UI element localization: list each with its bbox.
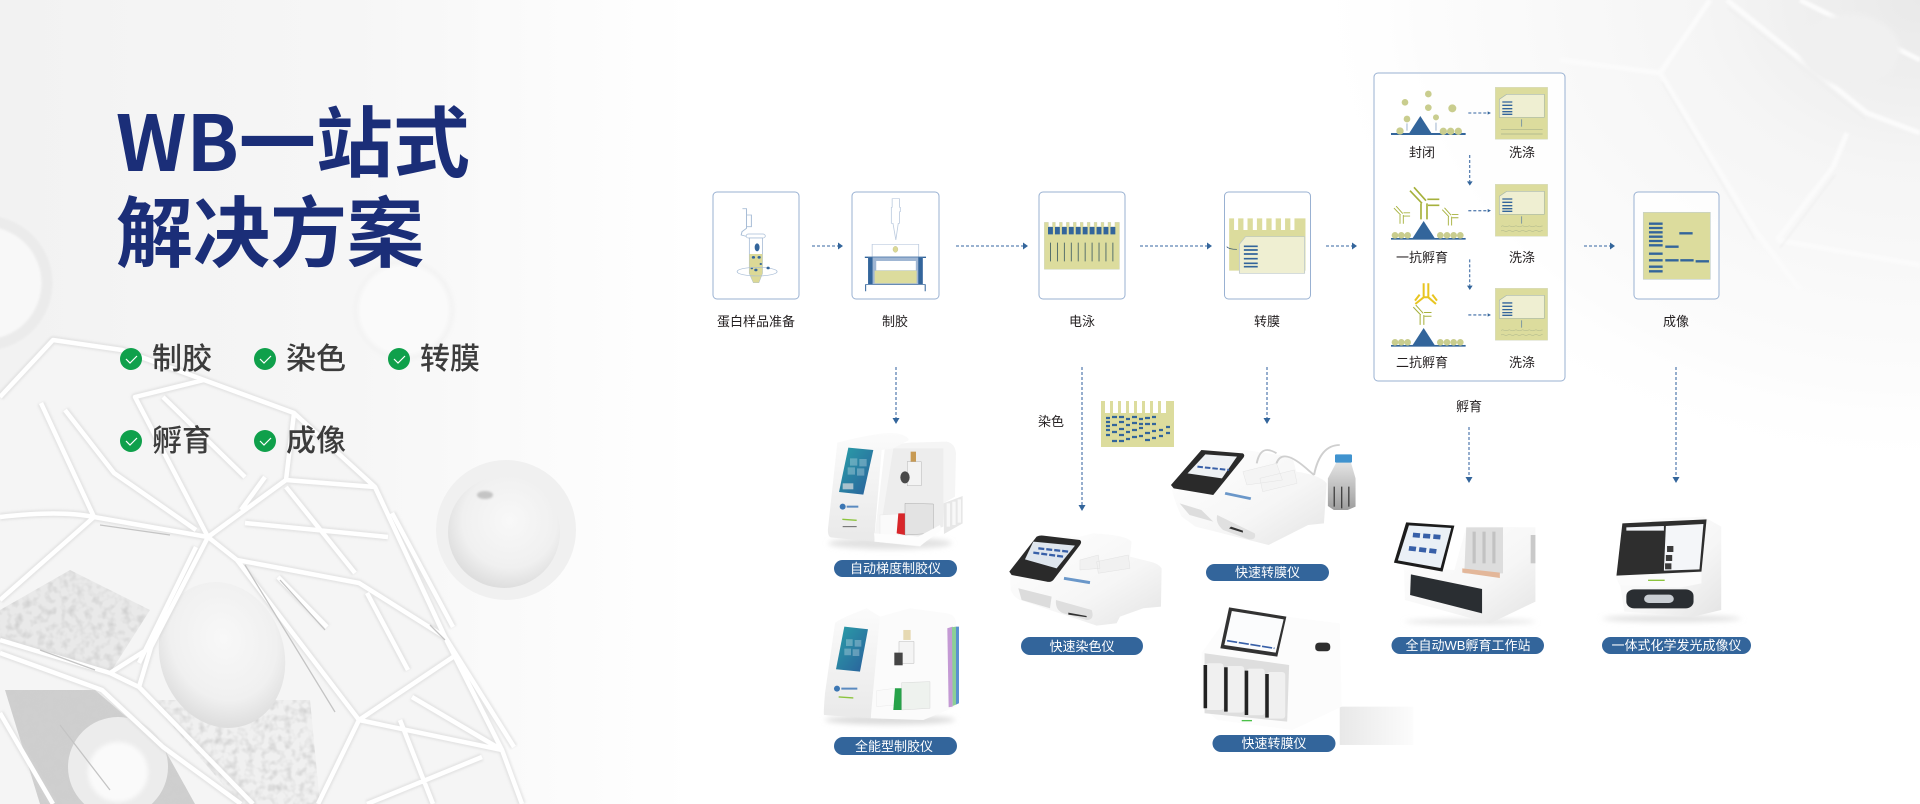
sub-step labels: 一抗孵育 xyxy=(1396,250,1448,265)
title: 解决方案 xyxy=(116,173,424,284)
label pill: 一体式化学发光成像仪 xyxy=(1611,638,1742,653)
decorative glass lattice, lower left xyxy=(0,221,576,804)
faint glass sphere xyxy=(356,262,452,358)
dome interior tone xyxy=(0,340,522,804)
step label: 电泳 xyxy=(1069,314,1095,329)
device: automatic gradient gel maker xyxy=(828,433,963,549)
fine dark edges on struts xyxy=(40,525,445,790)
blocking icon xyxy=(1391,91,1466,135)
lattice struts, shaded side xyxy=(0,340,522,804)
secondary antibody icon xyxy=(1391,283,1466,347)
arrow xyxy=(1326,242,1357,250)
vertical arrow: imaging xyxy=(1672,367,1680,483)
glass sphere, left edge xyxy=(0,221,47,345)
device: chemiluminescence imager xyxy=(1603,517,1741,622)
bullet list xyxy=(120,334,480,460)
step label: 制胶 xyxy=(882,314,908,329)
icon: imaged blot xyxy=(1643,212,1710,279)
label pill xyxy=(1206,564,1329,581)
bullet: 成像 xyxy=(254,416,346,460)
sub-step labels xyxy=(1396,145,1535,370)
icon: sample tube xyxy=(737,209,777,283)
bullet: 孵育: 孵育 xyxy=(152,416,212,460)
label: 染色: 染色 xyxy=(1038,414,1064,429)
label pill: 快速转膜仪 xyxy=(1235,565,1300,580)
arrow xyxy=(812,242,843,250)
wash card 1 xyxy=(1495,87,1548,139)
label pill xyxy=(834,560,957,577)
device: rapid stainer xyxy=(1009,533,1162,626)
vertical arrow: staining xyxy=(1078,367,1086,511)
wash card 3 xyxy=(1495,288,1548,340)
bullet: 染色 xyxy=(254,334,346,378)
sub-step labels: 封闭 xyxy=(1409,145,1435,160)
step: 电泳 xyxy=(1039,192,1125,299)
inner glass spheres xyxy=(68,565,304,804)
title xyxy=(116,83,470,284)
sub-step labels: 二抗孵育 xyxy=(1396,355,1448,370)
sub-step labels: 洗涤 xyxy=(1509,250,1535,265)
label pill: 快速染色仪 xyxy=(1049,639,1115,654)
label pill xyxy=(1212,735,1336,752)
bullet: 孵育 xyxy=(120,416,212,460)
title: WB一站式 xyxy=(116,83,470,194)
step: 转膜 xyxy=(1224,192,1310,299)
bullet: 成像: 成像 xyxy=(286,416,346,460)
step: 蛋白样品准备 xyxy=(713,192,799,299)
label: 孵育: 孵育 xyxy=(1456,399,1482,414)
internal arrows xyxy=(1467,111,1491,317)
label pill xyxy=(834,737,957,755)
arrow xyxy=(956,242,1028,250)
textured lattice panels xyxy=(0,570,320,804)
label pill: 快速转膜仪 xyxy=(1241,736,1307,751)
arrow xyxy=(1584,242,1615,250)
step: 成像 xyxy=(1634,192,1719,299)
sub-step labels: 洗涤 xyxy=(1509,145,1535,160)
icon: electrophoresis gel xyxy=(1044,222,1119,269)
sub-steps drawn in zoomed coordinates xyxy=(1391,87,1548,347)
step label: 转膜 xyxy=(1254,314,1280,329)
label pill xyxy=(1021,637,1143,655)
device: all-in-one gel maker xyxy=(824,608,959,725)
vertical arrow: gel casting xyxy=(892,367,900,424)
wash card 2 xyxy=(1495,184,1548,236)
vertical arrow: incubation xyxy=(1466,427,1472,483)
vertical arrow: transfer xyxy=(1264,367,1270,424)
bullet: 染色: 染色 xyxy=(286,334,346,378)
sub-step labels: 洗涤 xyxy=(1509,355,1535,370)
label pill: 全自动WB孵育工作站 xyxy=(1406,638,1530,653)
lattice struts, bright core xyxy=(0,340,522,804)
panel: incubation xyxy=(1374,73,1565,381)
stained gel xyxy=(1101,401,1174,447)
icon: membrane transfer xyxy=(1227,218,1305,273)
arrow xyxy=(1140,242,1212,250)
label pill: 自动梯度制胶仪 xyxy=(850,561,941,576)
step label: 蛋白样品准备 xyxy=(717,314,795,329)
bullet: 制胶 xyxy=(120,334,212,378)
device: multi-cartridge transfer unit xyxy=(1201,607,1413,745)
decorative glass lattice, upper right xyxy=(1560,0,1920,290)
device: rapid transfer unit with bottle xyxy=(1171,445,1356,545)
icon: gel casting xyxy=(865,199,926,291)
glass sphere, right of lattice xyxy=(436,460,576,600)
bullet: 制胶: 制胶 xyxy=(152,334,212,378)
bullet: 转膜: 转膜 xyxy=(420,334,480,378)
device: automated WB incubation workstation xyxy=(1394,522,1535,624)
step label: 成像 xyxy=(1663,314,1689,329)
primary antibody icon xyxy=(1391,187,1466,240)
step: 制胶 xyxy=(852,192,939,299)
label pill: 全能型制胶仪 xyxy=(855,739,933,754)
bullet: 转膜 xyxy=(388,334,480,378)
